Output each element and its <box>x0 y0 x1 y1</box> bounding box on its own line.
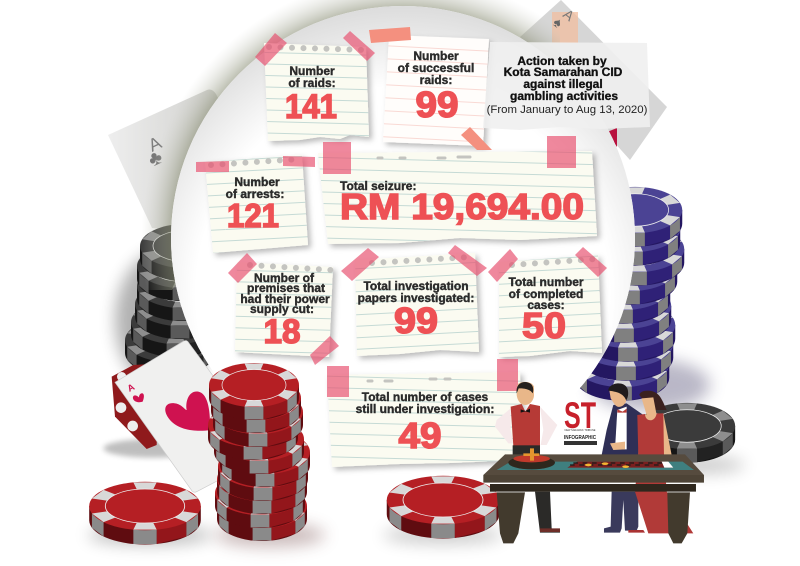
figure: man in suit <box>602 383 643 533</box>
note: investigation papers <box>341 245 487 356</box>
logo: ST infographic: NEW SARAWAK TRIBUNE <box>564 428 596 432</box>
icon: red die <box>112 363 160 449</box>
blue chip stack <box>575 187 710 411</box>
note: premises with power cut: supply cut: <box>250 302 314 316</box>
note: completed cases <box>488 247 607 357</box>
black chip stack <box>115 224 230 390</box>
note: total seizure: Total seizure: <box>340 179 416 193</box>
note: number of arrests: Number <box>234 175 280 189</box>
note: premises with power cut: premises that <box>247 281 325 295</box>
note: cases under investigation <box>327 359 524 467</box>
note: number of raids: Number <box>289 64 335 78</box>
note: premises with power cut: 18 <box>264 313 300 351</box>
note: cases under investigation: Total number of cases <box>362 390 489 404</box>
red chip stack <box>208 363 325 547</box>
red die and ace of hearts <box>103 341 270 492</box>
note: number of successful raids <box>369 27 492 150</box>
central plate <box>144 0 635 388</box>
logo: ST infographic: INFOGRAPHIC <box>564 435 596 441</box>
figure: dealer <box>495 382 560 533</box>
note: number of raids <box>255 31 375 141</box>
note: number of arrests: 121 <box>227 197 279 234</box>
title panel: against illegal <box>523 77 603 91</box>
red chip lying left <box>88 482 212 545</box>
title panel: Action taken by <box>517 54 607 68</box>
logo: ST infographic <box>564 395 597 445</box>
note: premises with power cut: had their power <box>240 292 330 306</box>
title panel: (From January to Aug 13, 2020) <box>487 104 648 116</box>
note: number of successful raids: raids: <box>420 73 452 87</box>
note: number of successful raids: 99 <box>416 84 458 125</box>
playing card: back right <box>520 0 667 160</box>
playing card: back left: ♣ <box>145 146 166 172</box>
note: number of arrests <box>196 155 315 253</box>
note: premises with power cut: Number of <box>254 271 315 285</box>
card: ace of hearts <box>115 341 270 492</box>
table: roulette table <box>483 448 704 543</box>
playing card: back left <box>108 90 290 240</box>
note: number of raids: 141 <box>285 88 337 126</box>
playing card: back right: ♠ <box>550 14 566 31</box>
logo: ST infographic: ST <box>564 395 596 436</box>
note: cases under investigation: 49 <box>398 415 442 456</box>
note: completed cases: 50 <box>522 305 566 346</box>
note: number of arrests: of arrests: <box>226 187 284 201</box>
note: completed cases: cases: <box>527 298 565 312</box>
title panel: gambling activities <box>510 89 618 103</box>
playing card: back right: A <box>560 6 578 25</box>
note: total seizure <box>318 136 597 244</box>
red chip lying by table <box>383 476 503 544</box>
note: number of successful raids: Number <box>413 49 459 63</box>
note: completed cases: of completed <box>509 287 583 301</box>
roulette scene <box>483 382 704 543</box>
note: number of successful raids: of successful <box>398 61 474 75</box>
figure: woman in red dress <box>628 391 693 533</box>
note: completed cases: Total number <box>508 275 584 289</box>
black chip by table <box>639 403 745 474</box>
note: number of raids: of raids: <box>288 76 336 90</box>
title panel <box>483 42 650 130</box>
note: total seizure: RM 19,694.00 <box>340 186 584 227</box>
note: investigation papers: papers investigated: <box>358 291 474 305</box>
card: ace of hearts: A <box>126 382 136 394</box>
note: premises with power cut <box>228 253 339 365</box>
note: investigation papers: 99 <box>394 300 438 341</box>
playing card: back left: A <box>145 132 165 156</box>
title panel: Kota Samarahan CID <box>504 65 623 79</box>
note: investigation papers: Total investigation <box>363 279 469 293</box>
note: cases under investigation: still under investigation: <box>356 402 494 416</box>
